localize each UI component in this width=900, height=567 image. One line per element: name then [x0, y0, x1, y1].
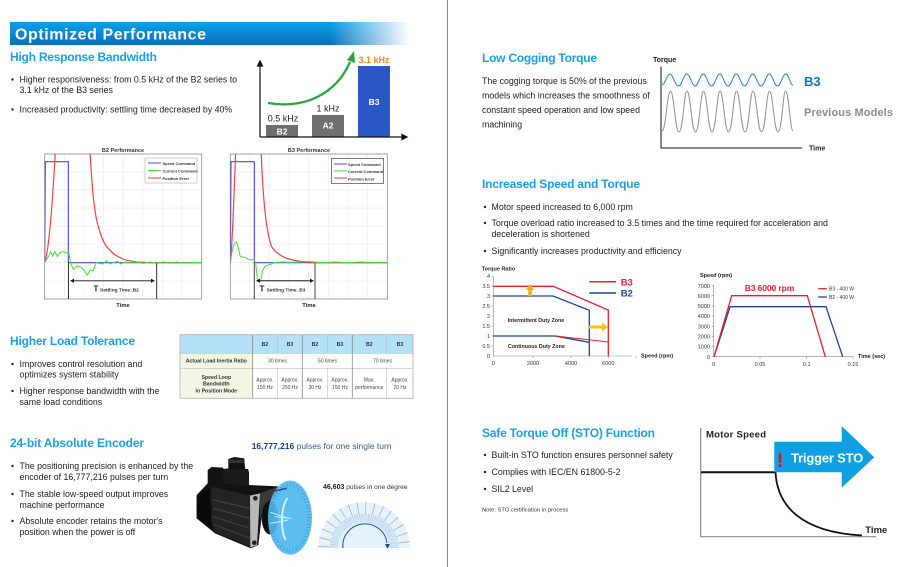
chart: torque ratio vs speed: B2	[621, 288, 633, 300]
chart: speed vs time: 3000	[698, 324, 710, 330]
chart: STO trigger: Trigger STO	[791, 450, 863, 465]
chart: STO trigger: Motor Speed	[706, 430, 766, 440]
chart: bandwidth bars: A2	[323, 120, 334, 130]
table: load inertia: B3	[287, 342, 293, 348]
table: load inertia: 150 Hz	[332, 385, 348, 391]
chart: STO trigger	[701, 426, 887, 537]
chart: torque ratio vs speed: 0.5	[482, 344, 490, 350]
title banner: Optimized Performance	[15, 26, 206, 44]
chart: B3 performance: Settling Time_B3	[266, 288, 306, 294]
text block: encoder bullets: The positioning precision is enhanced by the	[20, 461, 193, 471]
heading: absolute encoder: 24-bit Absolute Encoder	[10, 436, 144, 450]
chart: B2 performance: Position Error	[162, 176, 190, 181]
table: load inertia: Bandwidth	[203, 382, 230, 388]
chart: speed vs time: B2 - 400 W	[829, 295, 854, 301]
chart: torque ratio vs speed: 2000	[527, 361, 539, 367]
icon: servo motor with encoder disk	[197, 457, 312, 555]
chart: speed vs time: 1000	[698, 345, 710, 351]
callout: pulses per degree: 46,603 pulses in one degree	[323, 484, 408, 491]
table: load inertia: 30 Hz	[308, 385, 322, 391]
text block: encoder bullets: Absolute encoder retains the motor's	[20, 516, 163, 526]
chart: STO trigger: Time	[865, 525, 887, 536]
table: load inertia: Approx.	[306, 378, 324, 384]
chart: speed vs time: 0.05	[755, 362, 765, 368]
text block: speed bullets	[484, 202, 828, 256]
chart: B2 performance: B2 Performance	[102, 148, 144, 154]
text block: speed bullets: deceleration is shortened	[492, 229, 590, 239]
icon: encoder arc	[318, 502, 410, 548]
table: load inertia: 50 times	[318, 358, 337, 364]
chart: B3 performance: Current Command	[348, 169, 384, 174]
chart: speed vs time: 2000	[698, 334, 710, 340]
table: load inertia: 70 times	[373, 358, 392, 364]
chart: B2 performance	[45, 140, 202, 309]
chart: B2 performance: Time	[116, 303, 130, 309]
text block: cogging description	[482, 76, 650, 130]
table: load inertia: B3	[397, 342, 403, 348]
chart: torque ratio vs speed: 2	[487, 314, 490, 320]
chart: torque ratio vs speed: 2.5	[482, 304, 490, 310]
chart: B3 performance: B3 Performance	[288, 148, 330, 154]
chart: torque ratio vs speed: Speed (rpm)	[641, 354, 673, 360]
text block: encoder bullets: position when the power is off	[20, 527, 136, 537]
chart: torque ratio vs speed: 1.5	[482, 324, 490, 330]
chart: torque ratio vs speed: Continuous Duty Zone	[508, 344, 565, 350]
chart: torque ratio vs speed: 0	[487, 354, 490, 360]
text block: load bullets: same load conditions	[20, 397, 103, 407]
chart: B2 performance: Settling Time_B2	[100, 288, 139, 294]
chart: B3 performance: Position Error	[348, 176, 375, 182]
chart: torque ratio vs speed: 0	[492, 361, 495, 367]
table: load inertia	[180, 335, 413, 398]
chart: torque ratio vs speed: 3	[487, 294, 490, 300]
chart: speed vs time: 0	[707, 355, 710, 361]
text block: STO bullets: Complies with IEC/EN 61800-5-2	[492, 467, 621, 477]
text block: speed bullets: Significantly increases productivity and efficiency	[492, 246, 682, 256]
chart: cogging torque waves: Time	[809, 146, 825, 152]
chart: B2 performance: T	[94, 284, 98, 294]
chart: bandwidth bars: 3.1 kHz	[358, 55, 390, 65]
table: load inertia: in Position Mode	[196, 388, 237, 394]
chart: torque ratio vs speed: Intermittent Duty Zone	[508, 318, 564, 324]
table: load inertia: 20 Hz	[393, 385, 407, 391]
title banner	[10, 22, 410, 45]
chart: speed vs time: Time (sec)	[858, 354, 885, 360]
text block: encoder bullets: machine performance	[20, 500, 105, 510]
text block: STO bullets: Built-in STO function ensures personnel safety	[492, 450, 673, 460]
chart: speed vs time: 0	[712, 362, 715, 368]
chart: speed vs time: 7000	[698, 284, 710, 290]
chart: cogging torque waves: Previous Models	[804, 107, 893, 119]
text block: speed bullets: Motor speed increased to 6,000 rpm	[492, 202, 633, 212]
chart: bandwidth bars	[258, 51, 407, 140]
heading: high response bandwidth: High Response Bandwidth	[10, 50, 157, 64]
text block: cogging description: The cogging torque is 50% of the previous	[482, 76, 647, 86]
text block: STO bullets	[482, 450, 673, 514]
text block: load bullets	[11, 359, 159, 407]
table: load inertia: B3	[337, 342, 343, 348]
text block: cogging description: models which increases the smoothness of	[482, 90, 650, 100]
chart: torque ratio vs speed: Torque Ratio	[482, 266, 516, 272]
chart: speed vs time: Speed (rpm)	[700, 273, 732, 279]
text block: response bullets: 3.1 kHz of the B3 series	[20, 85, 113, 95]
chart: torque ratio vs speed: 6000	[602, 361, 614, 367]
chart: speed vs time: 6000	[698, 294, 710, 300]
chart: bandwidth bars: 0.5 kHz	[268, 114, 299, 124]
table: load inertia: 250 Hz	[282, 385, 298, 391]
chart: cogging torque waves: Torque	[653, 57, 676, 64]
chart: STO trigger: !	[777, 451, 783, 472]
table: load inertia: Speed Loop	[201, 375, 231, 381]
chart: torque ratio vs speed: 3.5	[482, 284, 490, 290]
text block: load bullets: Improves control resolution and	[20, 359, 142, 369]
text block: encoder bullets: The stable low-speed output improves	[20, 489, 169, 499]
chart: speed vs time: B3 - 400 W	[829, 287, 854, 293]
table: load inertia: performance	[355, 385, 384, 391]
chart: torque ratio vs speed: 4	[487, 274, 490, 280]
chart: cogging torque waves	[653, 57, 893, 152]
chart: bandwidth bars: 1 kHz	[316, 104, 340, 114]
table: load inertia: Max.	[364, 378, 375, 384]
text block: response bullets: Higher responsiveness: from 0.5 kHz of the B2 series to	[20, 74, 237, 84]
table: load inertia: 150 Hz	[257, 385, 273, 391]
table: load inertia: Approx.	[391, 378, 409, 384]
text block: response bullets	[11, 74, 237, 114]
chart: B2 performance: Current Command	[162, 168, 198, 174]
table: load inertia: Approx.	[256, 378, 274, 384]
chart: cogging torque waves: B3	[804, 74, 821, 89]
chart: torque ratio vs speed: 1	[487, 334, 490, 340]
chart: speed vs time: 0.15	[848, 362, 858, 368]
heading: higher load tolerance: Higher Load Tolerance	[10, 334, 135, 348]
text block: cogging description: constant speed operation and low speed	[482, 105, 640, 115]
chart: speed vs time	[698, 273, 885, 368]
table: load inertia: B2	[312, 342, 318, 348]
chart: B3 performance: T	[260, 284, 264, 294]
table: load inertia: Approx.	[281, 378, 299, 384]
text block: STO bullets: Note: STO certification in process	[482, 508, 568, 514]
table: load inertia: Approx.	[331, 378, 349, 384]
table: load inertia: 30 times	[268, 358, 287, 364]
chart: torque ratio vs speed: B3	[621, 278, 633, 288]
chart: B3 performance: Speed Command	[348, 162, 381, 167]
text block: encoder bullets: encoder of 16,777,216 pulses per turn	[20, 472, 168, 482]
chart: B3 performance: Time	[302, 303, 316, 309]
chart: torque ratio vs speed	[482, 266, 673, 367]
chart: bandwidth bars: B3	[369, 97, 380, 107]
text block: speed bullets: Torque overload ratio increased to 3.5 times and the time required for acceleration and	[492, 218, 828, 228]
callout: pulses per turn: 16,777,216 pulses for one single turn	[252, 441, 392, 451]
heading: increased speed and torque: Increased Speed and Torque	[482, 177, 640, 191]
chart: speed vs time: 4000	[698, 314, 710, 320]
text block: encoder bullets	[11, 461, 193, 537]
text block: response bullets: Increased productivity: settling time decreased by 40%	[20, 104, 232, 114]
chart: B2 performance: Speed Command	[162, 161, 196, 166]
chart: speed vs time: 5000	[698, 304, 710, 310]
text block: STO bullets: SIL2 Level	[492, 484, 533, 494]
heading: safe torque off: Safe Torque Off (STO) Function	[482, 426, 655, 440]
chart: B3 performance	[230, 140, 387, 309]
chart: speed vs time: B3 6000 rpm	[745, 283, 795, 293]
heading: low cogging torque: Low Cogging Torque	[482, 51, 597, 65]
table: load inertia: Actual Load Inertia Ratio	[186, 358, 247, 364]
chart: bandwidth bars: B2	[277, 126, 288, 136]
table: load inertia: B2	[262, 342, 268, 348]
chart: torque ratio vs speed: 4000	[565, 361, 577, 367]
text block: load bullets: optimizes system stability	[20, 370, 119, 380]
text block: load bullets: Higher response bandwidth with the	[20, 386, 159, 396]
chart: speed vs time: 0.1	[803, 362, 811, 368]
table: load inertia: B2	[366, 342, 373, 348]
text block: cogging description: machining	[482, 120, 522, 130]
